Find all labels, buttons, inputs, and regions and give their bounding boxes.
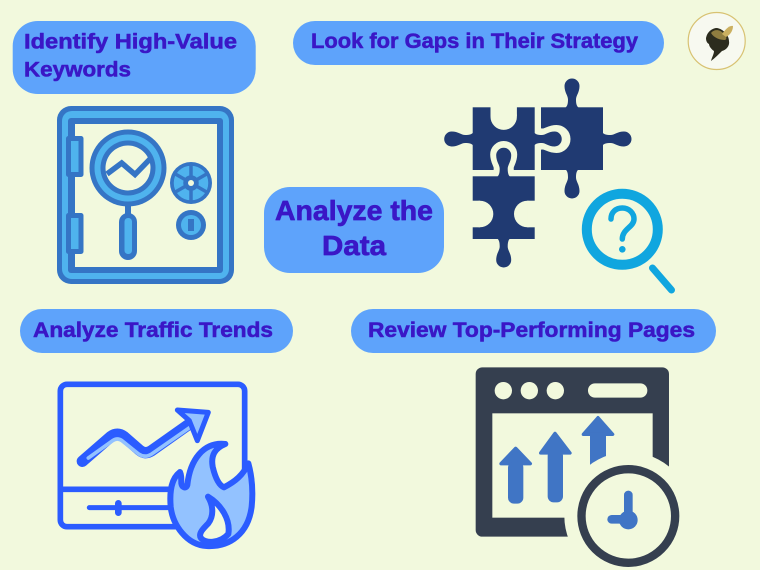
hinges [66,136,84,254]
piece two [534,78,632,198]
piece one [444,100,562,177]
dial [170,162,212,204]
keyhole knob [176,210,206,240]
icon: magnifier with question mark [587,194,672,290]
rising arrows [501,418,613,504]
icon: safe with magnifier [57,106,234,284]
heading: Analyze Traffic Trends: Analyze Traffic Trends [33,319,273,342]
icon: traffic chart with flame [60,384,252,546]
trend arrow [82,410,208,461]
heading: Review Top-Performing Pages: Review Top-Performing Pages [368,319,695,342]
monitor frame [60,384,245,527]
heading: Identify High-Value Keywords: Identify High-Value [24,30,237,54]
heading: Look for Gaps in Their Strategy [293,21,664,65]
heading: Analyze Traffic Trends [20,309,293,353]
piece three [467,148,541,268]
heading: Look for Gaps in Their Strategy: Look for Gaps in Their Strategy [311,30,638,53]
flame [170,444,252,546]
heading: Analyze the Data [264,187,444,273]
heading: Identify High-Value Keywords: Keywords [24,58,131,82]
magnifier with trend line [90,130,166,260]
icon: puzzle pieces [444,78,632,268]
heading: Identify High-Value Keywords [13,21,256,94]
clock [564,452,692,570]
heading: Analyze the Data: Analyze the [275,195,433,226]
icon: browser window with arrows and clock [476,367,692,570]
heading: Review Top-Performing Pages [351,309,716,353]
logo badge: silhouette with butterfly [688,12,745,70]
window [476,367,669,537]
heading: Analyze the Data: Data [322,230,386,261]
